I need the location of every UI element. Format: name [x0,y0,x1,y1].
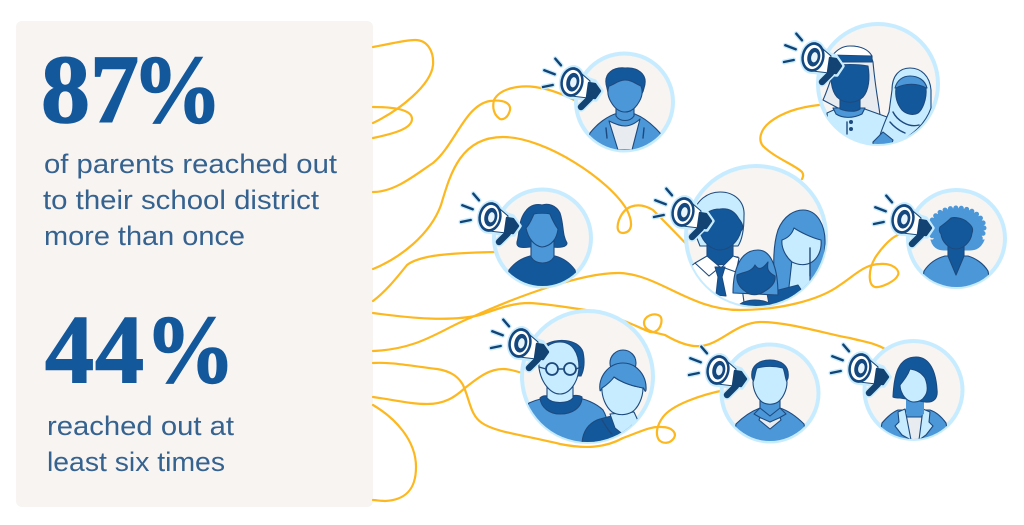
person: family with two parents and a child [680,166,826,315]
icon: megaphone, older couple [491,320,550,368]
icon: megaphone, wavy hair woman [461,194,520,242]
icon: megaphone, headdress couple [784,34,843,82]
text: 87% description [43,149,338,251]
person: woman with bob haircut and blazer [864,341,962,445]
stat: 44%: 44 [45,296,145,404]
stat: 87% [41,36,222,144]
person: man in headdress and woman in hijab [818,24,938,150]
icon: megaphone, curly hair woman [874,196,933,244]
person: man with collared sweater [722,344,818,450]
stat: 87%: % [132,36,222,144]
text: 87% description: more than once [44,221,245,251]
icon: megaphone, teen [543,59,602,107]
text: 87% description: to their school district [43,185,320,215]
panel background [16,21,373,507]
text: 44% description: least six times [47,447,225,477]
icon: megaphone, family [654,189,713,237]
text: 44% description [47,411,235,477]
icon: megaphone, sweater man [689,347,748,395]
person: older couple [516,311,653,455]
tangled yellow connection lines [373,40,898,501]
stat: 44%: % [145,296,235,404]
person: woman with wavy hair [494,190,591,295]
text: 87% description: of parents reached out [44,149,338,179]
stat: 44% [45,296,235,404]
icon: megaphone, blazer woman [831,345,890,393]
panel: statistics [16,21,373,507]
stat: 87%: 87 [41,36,139,144]
person: woman with curly hair [908,190,1005,295]
text: 44% description: reached out at [47,411,235,441]
person: teen with hoodie [576,54,673,160]
